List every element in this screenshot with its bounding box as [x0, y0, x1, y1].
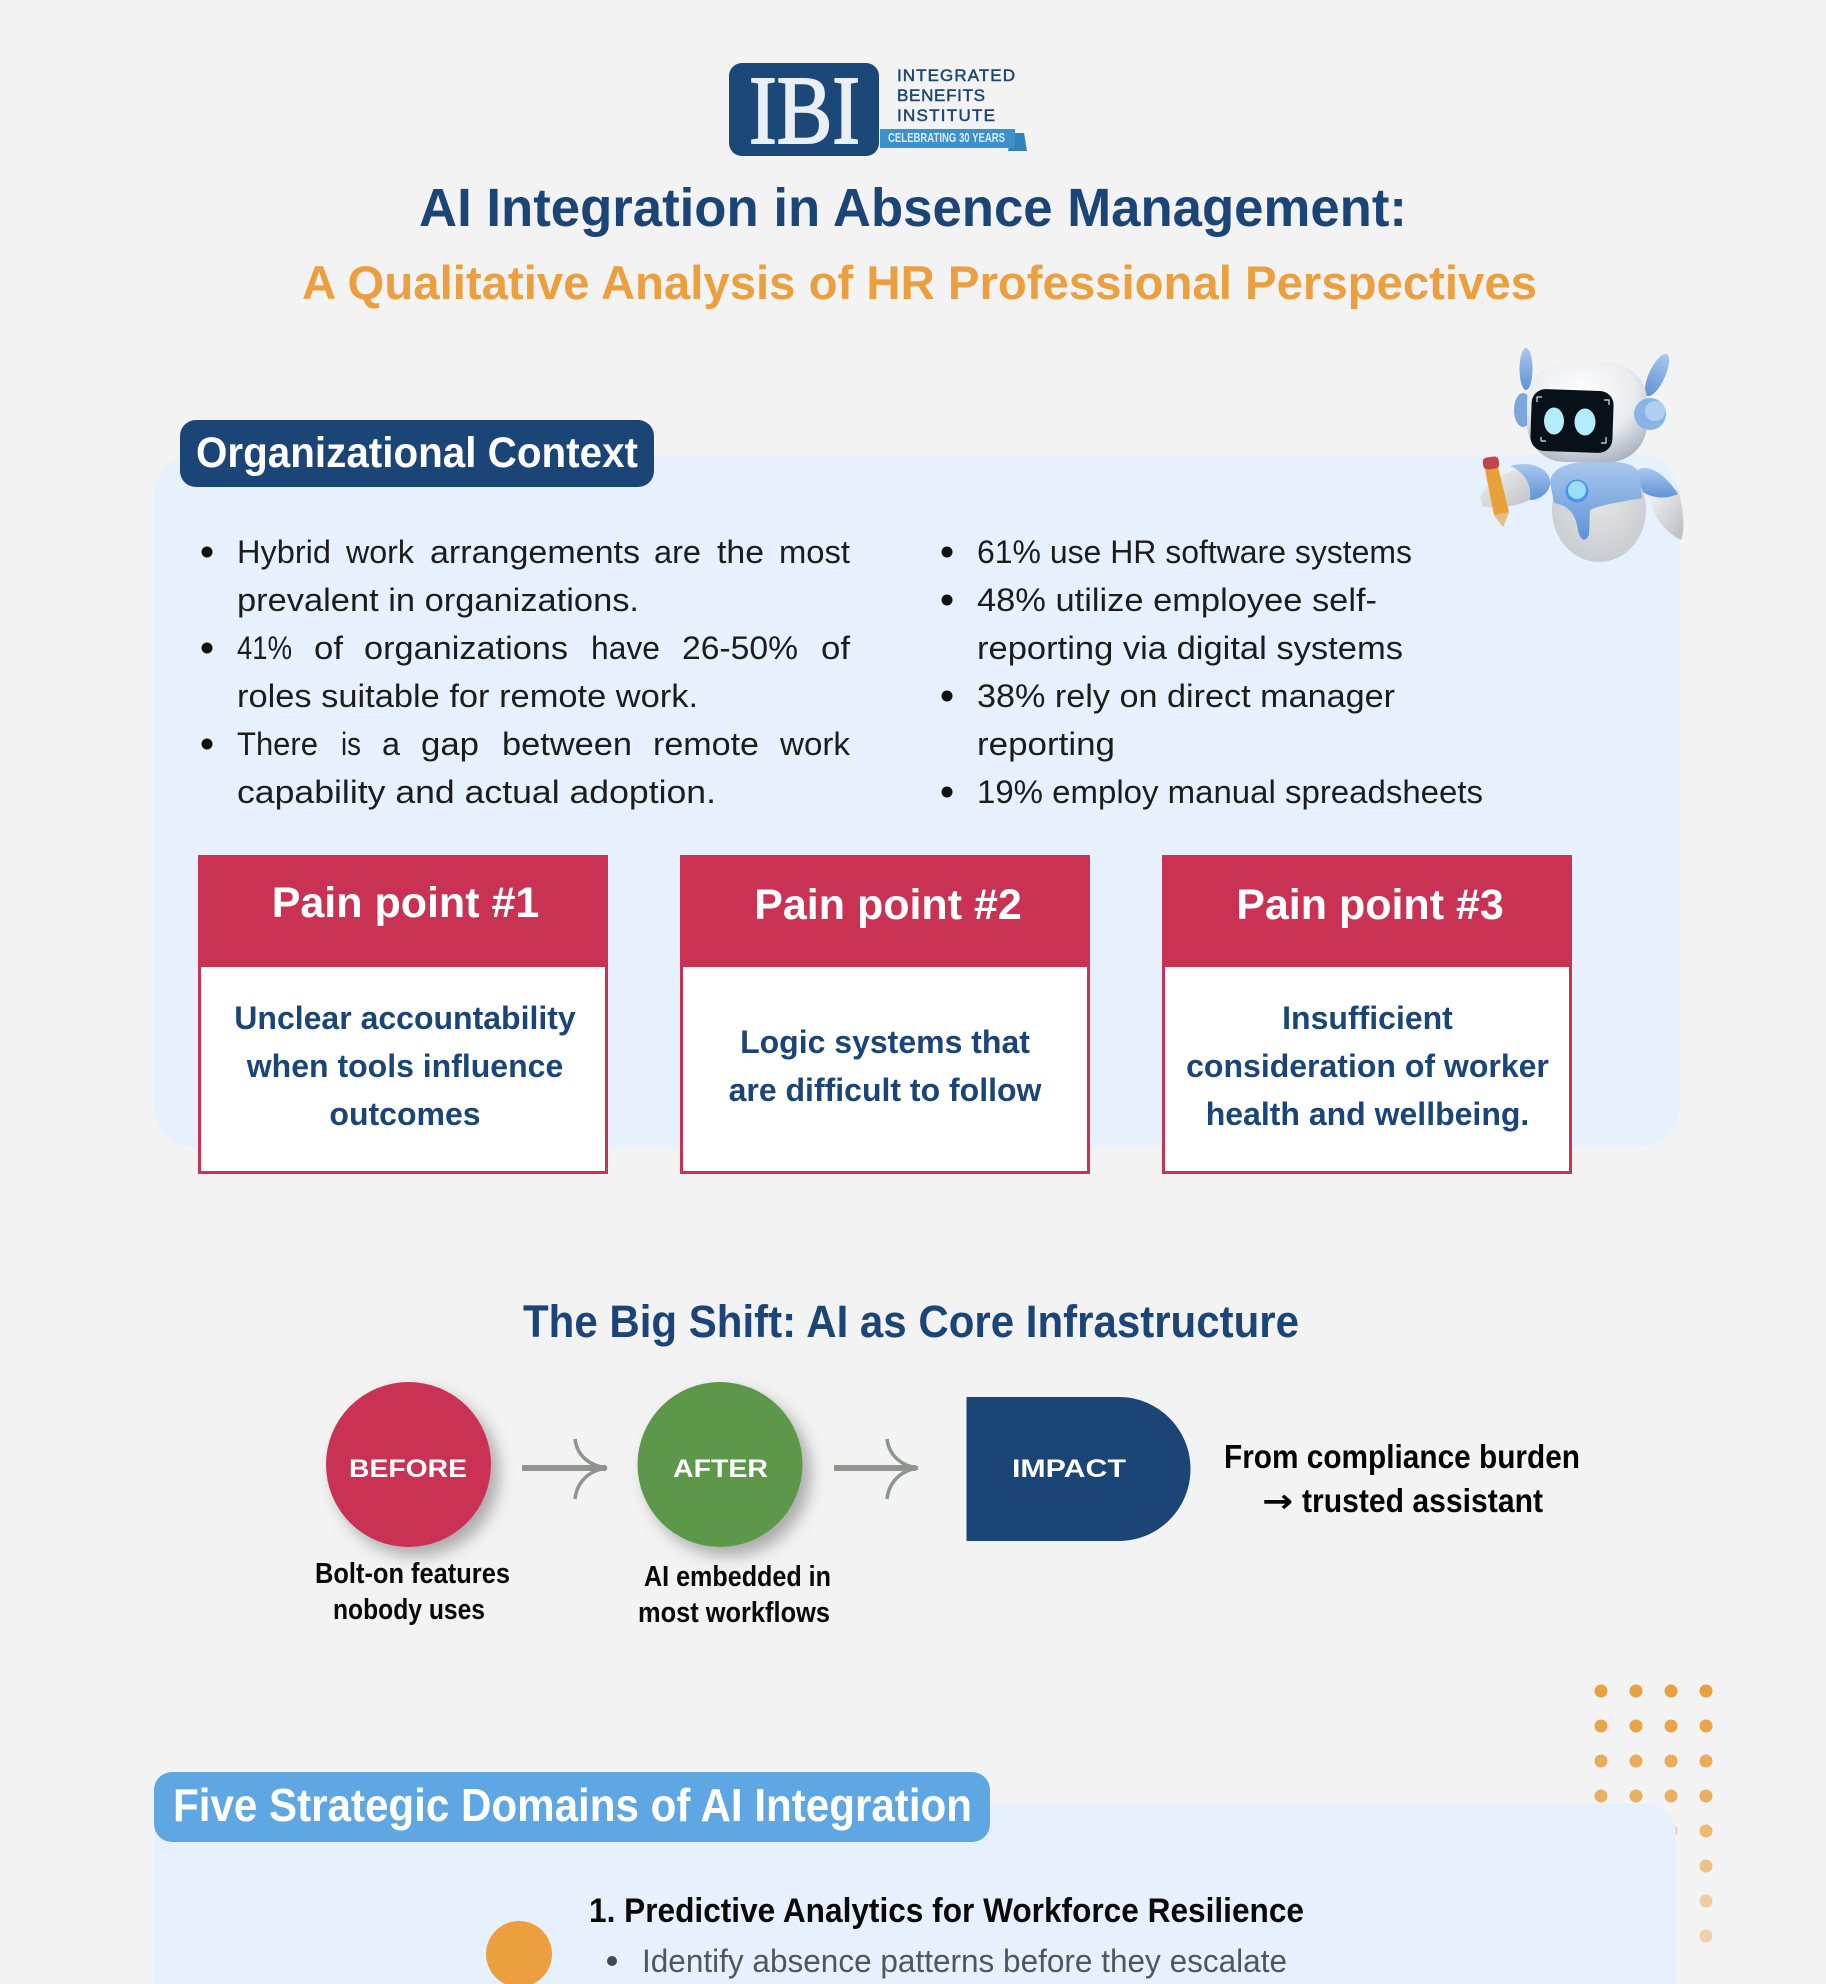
- right bullet list: 38% rely on direct manager: [977, 678, 1395, 714]
- icon: robot with pencil: [1480, 348, 1683, 562]
- impact shape: IMPACT: [1012, 1455, 1126, 1483]
- before caption: [315, 1558, 510, 1626]
- left bullet list: gap: [421, 726, 479, 762]
- pain point 3 heading: Pain point #3: [1236, 881, 1504, 929]
- title: AI Integration in Absence Management:: [419, 178, 1407, 238]
- after circle: AFTER: [673, 1455, 768, 1483]
- impact text: →: [1262, 1482, 1293, 1520]
- pain point 1 text: [234, 1000, 576, 1132]
- impact shape: [966, 1397, 1190, 1541]
- pain point card 3: [1162, 855, 1572, 1172]
- left bullet list: roles suitable for remote work.: [237, 678, 698, 714]
- robot pencil: [1482, 456, 1509, 527]
- heading: organizational context: Organizational Context: [196, 429, 638, 477]
- panel: organizational context: [154, 420, 1680, 1147]
- left bullet list: are: [654, 534, 701, 570]
- left bullet list: have: [591, 630, 660, 666]
- left bullet list: is: [341, 726, 361, 762]
- left bullet list: 41%: [237, 630, 292, 666]
- left bullet list: Hybrid: [237, 534, 331, 570]
- robot right arm: [1637, 468, 1683, 540]
- heading: five strategic domains: Five Strategic Domains of AI Integration: [173, 1779, 972, 1831]
- subtitle: A Qualitative Analysis of HR Professional Perspectives: [302, 256, 1537, 309]
- left bullet list: most: [779, 534, 850, 570]
- heading: five strategic domains: [154, 1772, 990, 1842]
- left bullet list: arrangements: [430, 534, 640, 570]
- logo: Integrated Benefits Institute: CELEBRATING 30 YEARS: [888, 131, 1005, 145]
- pain point 2 heading: Pain point #2: [754, 881, 1022, 929]
- pain point 3 text: Insufficient: [1282, 1000, 1453, 1036]
- right bullet list: [942, 534, 1483, 810]
- left bullet list: prevalent in organizations.: [237, 582, 639, 618]
- left bullet list: 26-50%: [682, 630, 798, 666]
- left bullet list: There: [237, 726, 318, 762]
- decorative dot grid: [1594, 1684, 1712, 1942]
- pain point card 2: [680, 855, 1090, 1172]
- arrow: after to impact: [834, 1439, 918, 1499]
- left bullet list: the: [717, 534, 764, 570]
- pain point 3 text: health and wellbeing.: [1206, 1096, 1529, 1132]
- logo: Integrated Benefits Institute: INSTITUTE: [897, 106, 995, 125]
- robot body: [1550, 458, 1646, 562]
- left bullet list: of: [821, 630, 850, 666]
- heading: organizational context: [180, 420, 654, 487]
- pain point 2 text: are difficult to follow: [729, 1072, 1042, 1108]
- logo: Integrated Benefits Institute: BENEFITS: [897, 86, 985, 105]
- left bullet list: remote: [653, 726, 759, 762]
- left bullet list: of: [314, 630, 343, 666]
- pain point 2 text: [729, 1024, 1042, 1108]
- left bullet list: capability and actual adoption.: [237, 774, 716, 810]
- after caption: [638, 1561, 831, 1629]
- pain point 1 heading: Pain point #1: [272, 879, 539, 927]
- left bullet list: a: [382, 726, 400, 762]
- right bullet list: reporting via digital systems: [977, 630, 1403, 666]
- impact text: trusted assistant: [1302, 1482, 1543, 1519]
- pain point 1 text: when tools influence: [246, 1048, 563, 1084]
- impact text: [1224, 1438, 1580, 1520]
- logo: Integrated Benefits Institute: [729, 57, 1027, 164]
- pain point 3 text: [1186, 1000, 1549, 1132]
- domain 1 bullet: Identify absence patterns before they escalate: [642, 1943, 1287, 1979]
- before circle: [326, 1382, 491, 1547]
- right bullet list: 48% utilize employee self-: [977, 582, 1377, 618]
- left bullet list: work: [779, 726, 851, 762]
- pain point card 1: [198, 855, 608, 1172]
- robot head: [1527, 363, 1666, 462]
- before circle: BEFORE: [349, 1455, 467, 1483]
- impact text: From compliance burden: [1224, 1438, 1580, 1475]
- robot left arm: [1480, 464, 1550, 507]
- after caption: AI embedded in: [644, 1561, 831, 1593]
- heading: the big shift: The Big Shift: AI as Core Infrastructure: [523, 1296, 1299, 1347]
- logo: Integrated Benefits Institute: IBI: [749, 57, 860, 164]
- left bullet list: organizations: [364, 630, 568, 666]
- pain point 2 text: Logic systems that: [740, 1024, 1030, 1060]
- before caption: nobody uses: [333, 1594, 485, 1626]
- right bullet list: 61% use HR software systems: [977, 534, 1412, 570]
- domain 1 marker: [486, 1921, 552, 1984]
- pain point 1 text: outcomes: [329, 1096, 481, 1132]
- pain point 1 text: Unclear accountability: [234, 1000, 576, 1036]
- arrow: before to after: [522, 1439, 607, 1499]
- after caption: most workflows: [638, 1597, 830, 1629]
- left bullet list: work: [345, 534, 415, 570]
- panel: five strategic domains: [154, 1772, 1676, 1984]
- logo: Integrated Benefits Institute: INTEGRATED: [897, 66, 1015, 85]
- pain point 3 text: consideration of worker: [1186, 1048, 1549, 1084]
- domain 1 title: 1. Predictive Analytics for Workforce Resilience: [589, 1892, 1304, 1930]
- left bullet list: [202, 534, 851, 810]
- right bullet list: reporting: [977, 726, 1115, 762]
- before caption: Bolt-on features: [315, 1558, 510, 1590]
- after circle: [638, 1382, 802, 1547]
- left bullet list: between: [502, 726, 632, 762]
- right bullet list: 19% employ manual spreadsheets: [977, 774, 1483, 810]
